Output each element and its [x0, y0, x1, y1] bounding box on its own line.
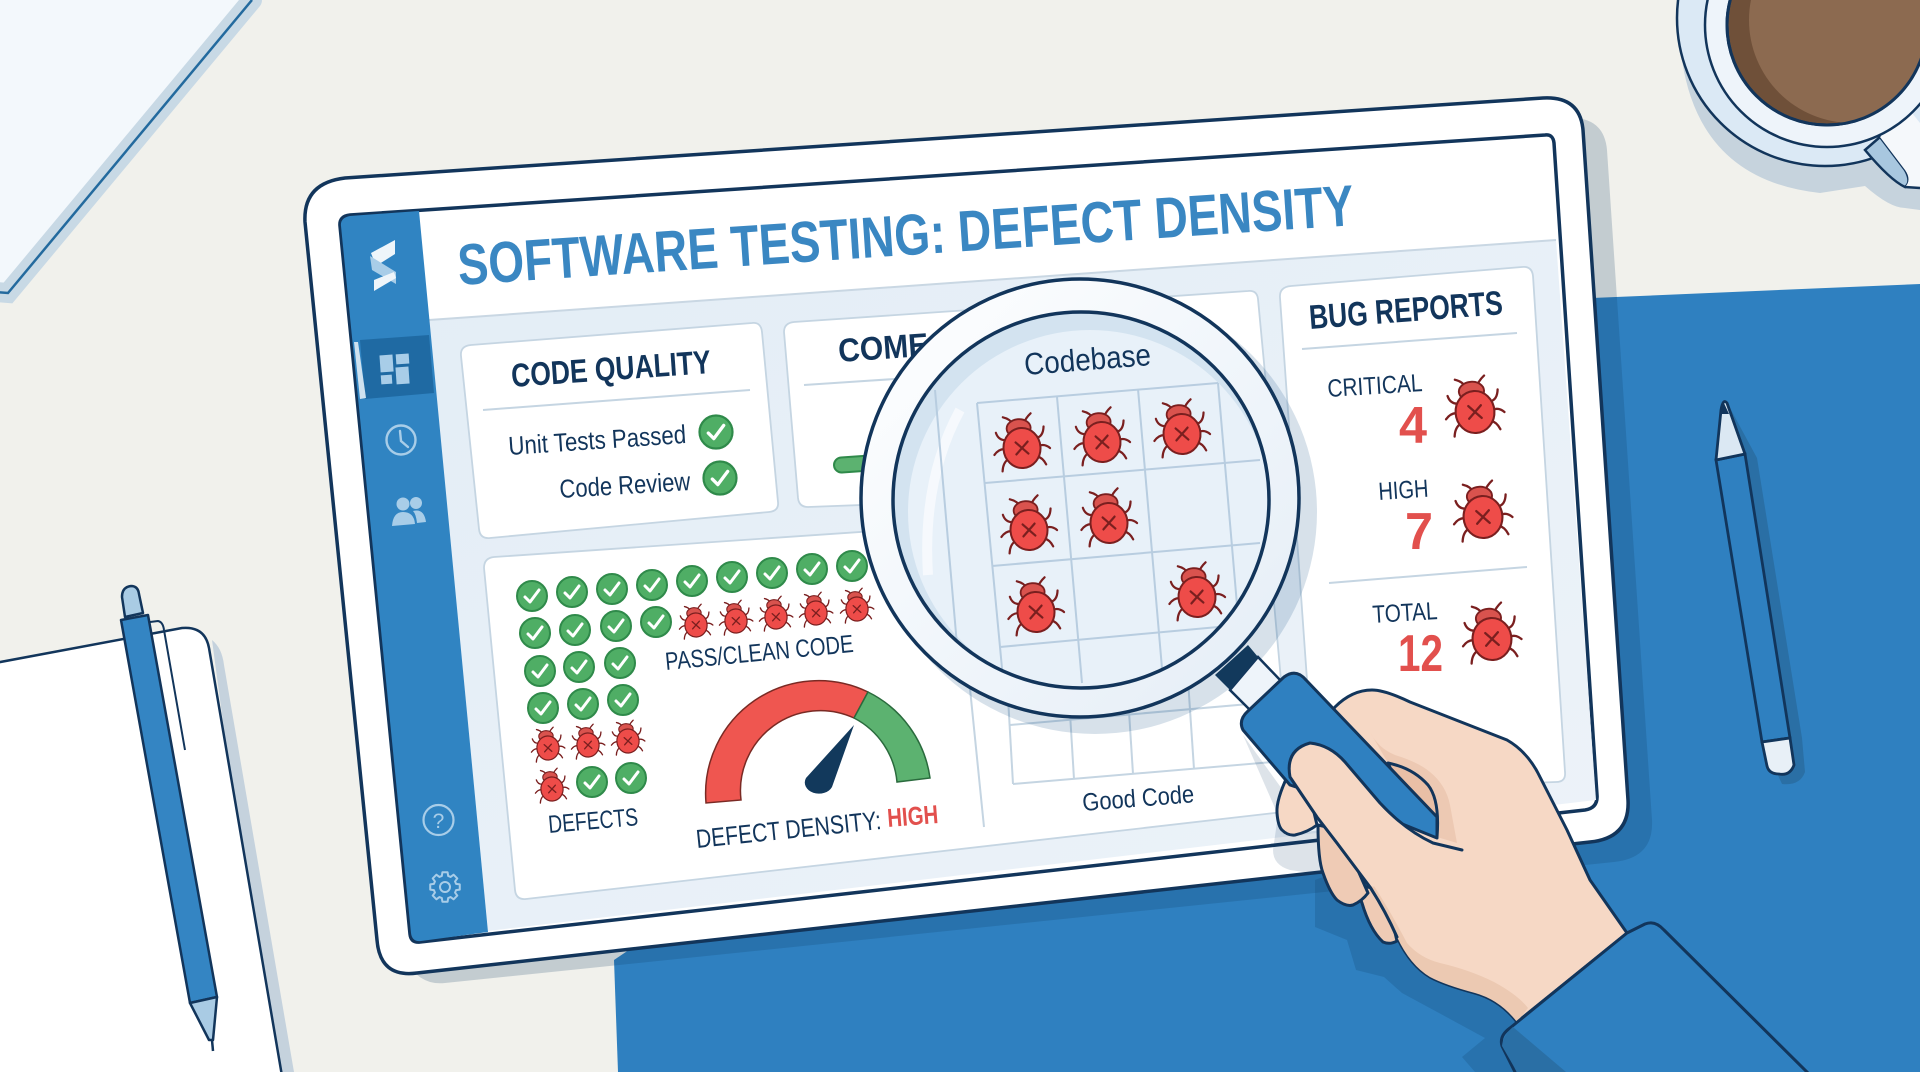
icon: dashboard	[379, 354, 410, 384]
gauge	[706, 681, 930, 803]
tablet frame	[305, 98, 1628, 974]
lens	[893, 312, 1269, 688]
icon: help	[424, 805, 454, 835]
pictogram: checks and bugs	[517, 551, 875, 803]
sleeve	[1501, 923, 1811, 1072]
thumb	[1289, 743, 1462, 887]
active nav item	[360, 335, 434, 399]
panel: defect overview	[484, 505, 1292, 899]
stat: critical: CRITICAL	[1327, 369, 1423, 403]
web shading	[1370, 732, 1457, 843]
icon: settings	[430, 872, 460, 902]
stat: total: TOTAL	[1372, 597, 1438, 629]
ring	[861, 279, 1299, 717]
coffee cup	[1677, 0, 1920, 210]
handle	[1241, 673, 1437, 838]
codebase grid	[935, 383, 1260, 700]
pen on notebook	[121, 586, 217, 1051]
sidebar	[341, 211, 488, 941]
heading: BUG REPORTS	[1308, 284, 1504, 337]
shaft	[1230, 657, 1282, 712]
lens bugs	[992, 398, 1226, 636]
icon: clock	[386, 426, 416, 454]
icon: check	[700, 416, 732, 448]
back finger two	[1318, 825, 1368, 905]
lens shadow	[873, 290, 1317, 734]
tablet screen	[340, 135, 1597, 942]
back finger three	[1355, 885, 1397, 943]
gauge label: DEFECT DENSITY:	[695, 805, 883, 854]
label: pass clean code: PASS/CLEAN CODE	[664, 630, 855, 676]
hand shadow on blue mat	[1315, 860, 1600, 1072]
caption: good code: Good Code	[1081, 780, 1195, 817]
stat: high	[1378, 475, 1514, 561]
stat: total	[1372, 597, 1523, 683]
pencil right	[1716, 401, 1805, 784]
paper sheet top left	[0, 0, 262, 302]
icon: check	[704, 462, 736, 494]
heading: COMEA	[837, 324, 951, 369]
panel: code quality	[461, 323, 778, 538]
label: defects: DEFECTS	[547, 803, 639, 839]
gauge value: HIGH	[886, 799, 939, 833]
stat: high: HIGH	[1378, 475, 1429, 506]
title: SOFTWARE TESTING: DEFECT DENSITY	[456, 173, 1356, 298]
icon: people	[392, 497, 426, 526]
panel: bug reports	[1280, 267, 1565, 790]
tablet shadow	[333, 118, 1652, 983]
magnifying glass	[861, 279, 1317, 734]
stat: critical: 4	[1399, 397, 1427, 455]
row: unit tests: Unit Tests Passed	[507, 419, 687, 461]
blue desk mat	[614, 284, 1920, 1072]
web gap	[1388, 763, 1438, 837]
notebook	[0, 628, 294, 1072]
icon: help: ?	[433, 810, 444, 833]
hand shadow on tablet	[1243, 735, 1325, 875]
heading: CODE QUALITY	[510, 343, 712, 394]
stat: total: 12	[1398, 625, 1443, 683]
panel: comparison	[784, 291, 1275, 507]
progress bar	[834, 454, 894, 473]
icon: logo	[370, 240, 396, 291]
grid behind lens	[1007, 680, 1273, 784]
row: code review: Code Review	[559, 466, 691, 504]
back finger one	[1277, 775, 1317, 835]
hand holding magnifier	[1241, 673, 1627, 1022]
palm	[1290, 690, 1627, 1022]
stat: critical	[1327, 369, 1506, 455]
palm shading	[1370, 880, 1528, 1022]
lens label: Codebase	[1023, 337, 1152, 382]
collar	[1215, 645, 1258, 690]
stat: high: 7	[1405, 503, 1433, 561]
